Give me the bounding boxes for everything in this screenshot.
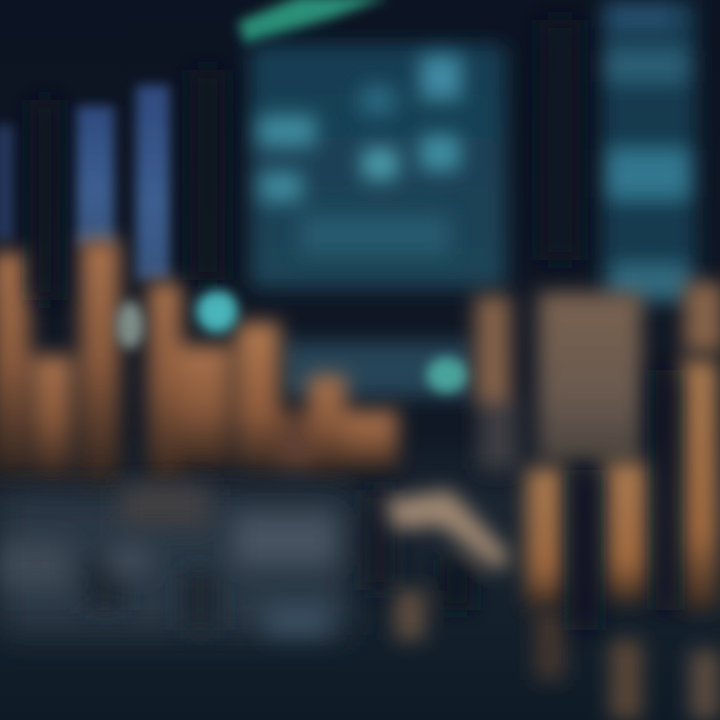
- lower reflections right: [535, 610, 720, 720]
- teal glow left: [196, 289, 238, 333]
- pale glow: [116, 301, 144, 349]
- tan reflection: [385, 490, 510, 640]
- reflections: [0, 495, 350, 635]
- screen highlights: [258, 55, 462, 255]
- orange bars left: [0, 240, 398, 487]
- right data screen: [602, 0, 696, 301]
- lower panel: [282, 342, 472, 397]
- reflection highlights: [0, 485, 395, 635]
- central data screen: [250, 44, 506, 288]
- left blue bars: [0, 85, 170, 280]
- right orange bars: [526, 360, 718, 610]
- green banner: [238, 0, 390, 44]
- teal glow centre: [426, 357, 468, 393]
- dark vertical gaps: [30, 20, 677, 630]
- right brown bars: [475, 282, 720, 470]
